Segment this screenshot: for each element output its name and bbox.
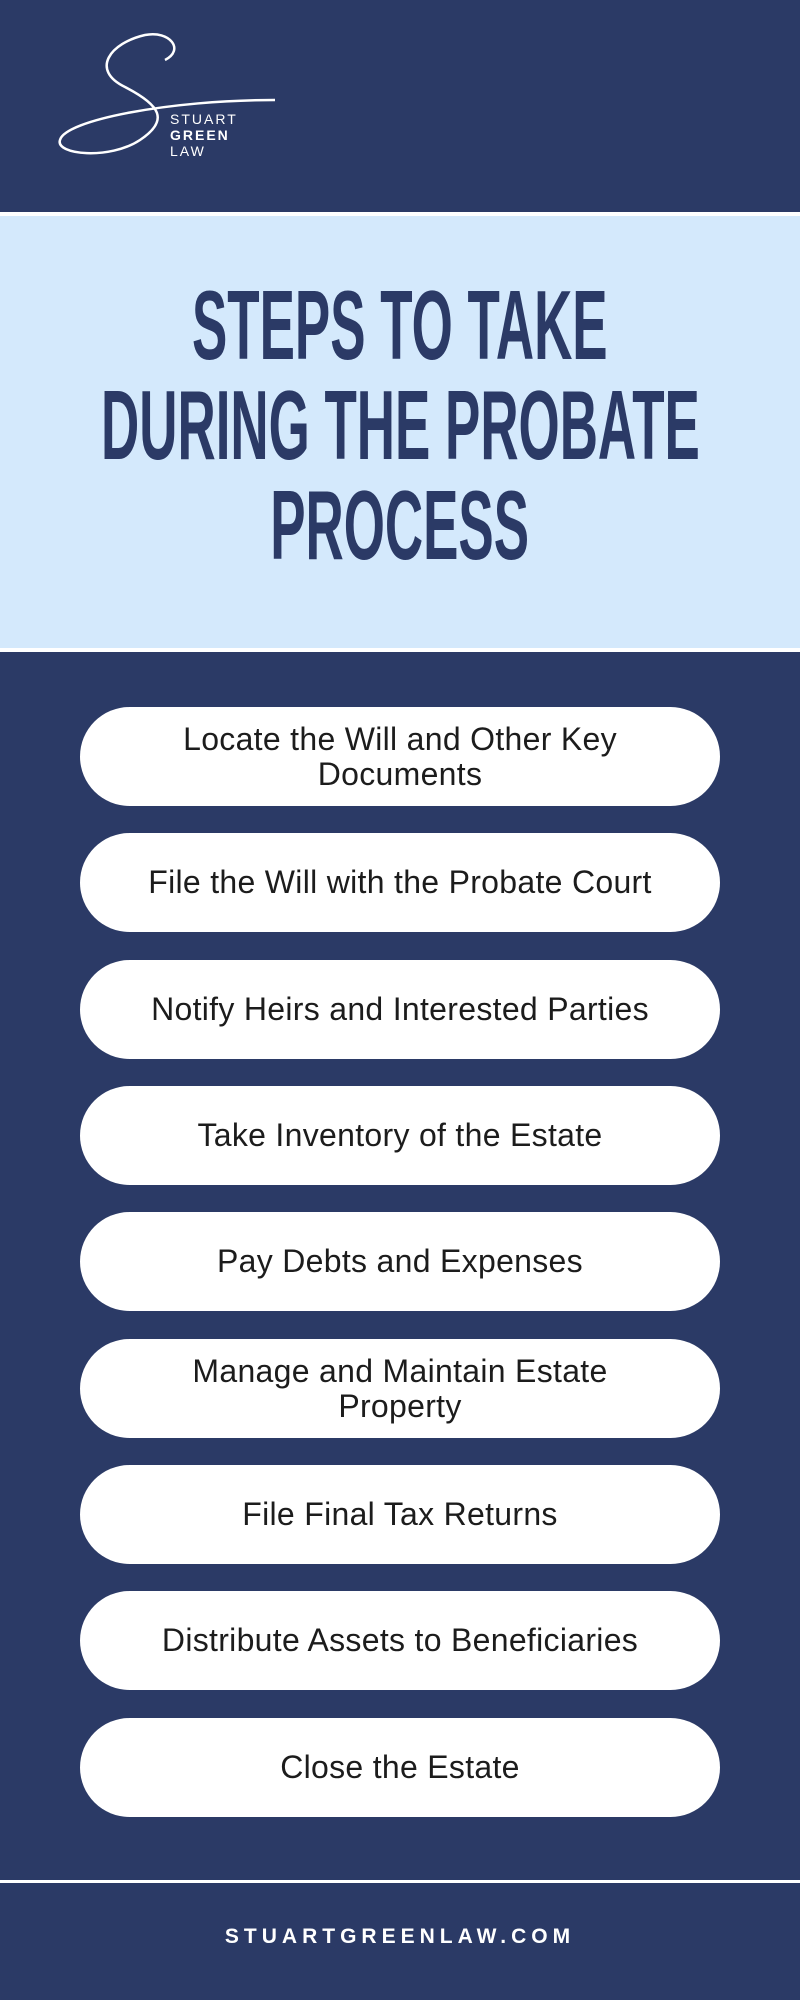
step 9: Close the Estate: [280, 1749, 520, 1785]
logo wordmark: LAW: [170, 143, 206, 159]
title: [101, 270, 699, 580]
step 5: [80, 1212, 720, 1311]
step 4: [80, 1086, 720, 1185]
logo script S: [58, 33, 275, 154]
header band: [0, 0, 800, 212]
step 1: [80, 707, 720, 806]
step 6: Manage and Maintain Estate Property: [192, 1352, 608, 1424]
step 6: [80, 1339, 720, 1438]
step 2: [80, 833, 720, 932]
title panel: [0, 216, 800, 648]
title: DURING THE PROBATE: [101, 370, 699, 480]
step 8: [80, 1591, 720, 1690]
step 8: Distribute Assets to Beneficiaries: [162, 1622, 638, 1658]
step 5: Pay Debts and Expenses: [217, 1243, 583, 1279]
title: STEPS TO TAKE: [192, 270, 608, 380]
step 1: Locate the Will and Other Key Documents: [183, 720, 617, 792]
logo wordmark: STUART: [170, 111, 238, 127]
logo wordmark: [170, 111, 238, 159]
logo: [58, 33, 275, 159]
footer url: STUARTGREENLAW.COM: [225, 1925, 575, 1948]
logo wordmark: GREEN: [170, 127, 230, 143]
step 4: Take Inventory of the Estate: [197, 1117, 603, 1153]
step 7: [80, 1465, 720, 1564]
steps list: [80, 707, 720, 1817]
step 7: File Final Tax Returns: [242, 1496, 558, 1532]
step 3: [80, 960, 720, 1059]
title: PROCESS: [271, 470, 529, 580]
step 9: [80, 1718, 720, 1817]
step 3: Notify Heirs and Interested Parties: [151, 991, 649, 1027]
step 2: File the Will with the Probate Court: [148, 864, 652, 900]
